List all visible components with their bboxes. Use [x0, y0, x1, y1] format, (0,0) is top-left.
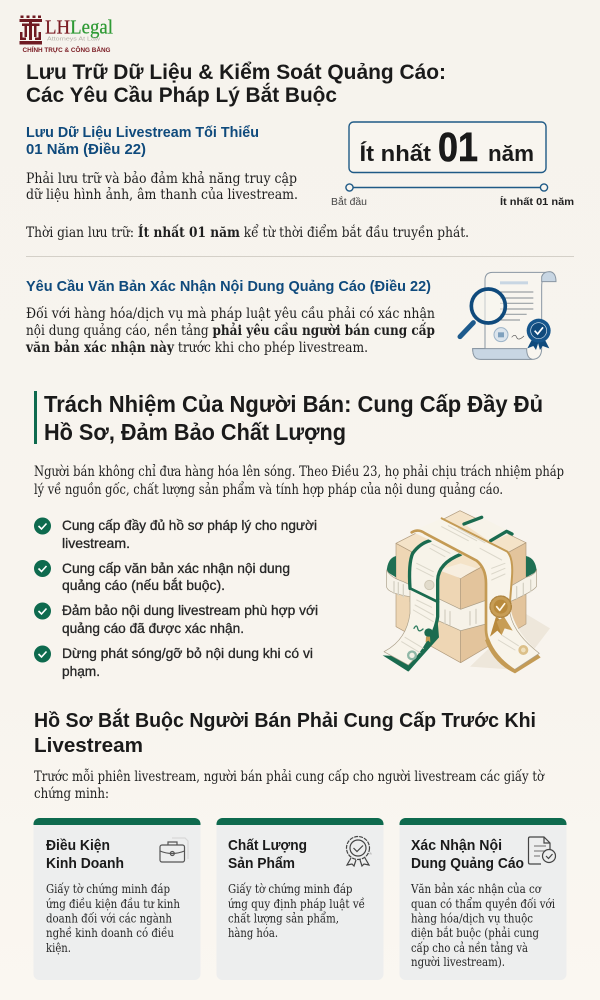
checklist — [34, 518, 318, 679]
card title: Dung Quảng Cáo — [411, 856, 524, 872]
card text: Giấy tờ chứng minh đáp — [228, 881, 353, 896]
card title: Kinh Doanh — [46, 856, 124, 872]
box faces — [396, 543, 461, 663]
illustration: package wrapped in documents — [383, 511, 550, 673]
panel: ad content confirmation — [400, 818, 566, 980]
section heading: seller responsibility — [34, 391, 543, 445]
card text: chất lượng sản phẩm, — [228, 910, 339, 926]
green strap, back part — [464, 517, 512, 542]
list item 1 — [34, 518, 317, 551]
title — [26, 60, 446, 107]
heading: data retention: 01 Năm (Điều 22) — [26, 142, 146, 158]
card title — [411, 838, 524, 872]
card title: Sản Phẩm — [228, 856, 295, 872]
band back ends — [387, 556, 396, 577]
text: confirmation description: văn bản xác nhận này trước khi cho phép livestream. — [25, 340, 368, 356]
card text: nghề kinh doanh có điều — [46, 925, 174, 940]
green strap, front part and tail — [383, 617, 439, 672]
text: retention description — [26, 171, 298, 203]
icon: award rosette — [346, 836, 372, 866]
card text: người livestream). — [411, 955, 505, 969]
card title: Điều Kiện — [46, 838, 110, 854]
gold strap — [485, 628, 541, 673]
logo wordmark: LHLegal — [45, 16, 113, 38]
list item 1: livestream. — [62, 536, 130, 551]
timeline — [331, 184, 574, 208]
card text: Giấy tờ chứng minh đáp — [46, 881, 170, 896]
section heading: seller responsibility: Trách Nhiệm Của Người Bán: Cung Cấp Đầy Đủ — [44, 391, 543, 417]
card title — [228, 838, 307, 872]
list item 4: phạm. — [62, 664, 100, 679]
text: retention period: Thời gian lưu trữ: Ít nhất 01 năm kể từ thời điểm bắt đầu truyền phát. — [26, 225, 469, 241]
card text: diện bắt buộc (phải cung — [411, 925, 539, 940]
callout: at least 01 year: 01 — [438, 124, 478, 170]
text: confirmation description: nội dung quảng cáo, nền tảng phải yêu cầu người bán cung cấp — [26, 323, 435, 339]
heading: ad content confirmation: Yêu Cầu Văn Bản Xác Nhận Nội Dung Quảng Cáo (Điều 22) — [26, 279, 431, 295]
card text — [410, 882, 555, 969]
list item 2: quảng cáo (nếu bắt buộc). — [62, 578, 225, 593]
list item 4 — [34, 646, 313, 679]
callout: at least 01 year — [349, 122, 546, 172]
list item 2: Cung cấp văn bản xác nhận nội dung — [62, 561, 290, 576]
panel: business conditions — [34, 818, 200, 980]
logo motto: CHÍNH TRỰC & CÔNG BẰNG — [22, 46, 111, 54]
text: retention description: dữ liệu hình ảnh, âm thanh của livestream. — [26, 187, 298, 203]
icon: document with magnifier and seal — [460, 272, 556, 359]
card text: ứng quy định pháp luật về — [228, 896, 365, 911]
list item 3: Đảm bảo nội dung livestream phù hợp với — [62, 603, 318, 618]
text: seller responsibility intro: lý về nguồn gốc, chất lượng sản phẩm và tính hợp pháp của nội dung quảng cáo. — [34, 482, 503, 498]
icon: logo mark — [20, 16, 42, 44]
card text: cấp cho cả nền tảng và — [411, 940, 528, 955]
icon: briefcase — [160, 838, 188, 862]
list item 3: quảng cáo đã được xác nhận. — [62, 621, 244, 636]
text: seller responsibility intro — [34, 464, 564, 498]
card text: doanh đối với các ngành — [46, 910, 172, 926]
text: confirmation description — [25, 306, 435, 356]
logo tagline: Attorneys At Law — [47, 36, 100, 42]
gold seal — [490, 617, 503, 637]
callout: at least 01 year: năm — [488, 141, 534, 166]
card text: hàng hóa/dịch vụ thuộc — [411, 912, 533, 926]
section heading: required documents — [34, 708, 536, 757]
timeline: Bắt đầu — [331, 195, 367, 208]
card title: Chất Lượng — [228, 838, 307, 854]
icon: award rosette: * — [369, 851, 372, 860]
card text: hàng hóa. — [228, 926, 278, 940]
card text: Văn bản xác nhận của cơ — [410, 882, 542, 896]
title: Lưu Trữ Dữ Liệu & Kiểm Soát Quảng Cáo: — [26, 60, 446, 84]
text: retention description: Phải lưu trữ và bảo đảm khả năng truy cập — [26, 171, 297, 187]
card text: quan có thẩm quyền đối với — [411, 896, 555, 911]
text: required documents intro — [34, 769, 545, 802]
list item 2 — [34, 560, 290, 593]
logo — [20, 16, 113, 54]
list item 3 — [34, 602, 318, 636]
title: Các Yêu Cầu Pháp Lý Bắt Buộc — [26, 82, 337, 107]
callout: at least 01 year: Ít nhất — [360, 141, 432, 166]
icon: document check — [528, 837, 556, 864]
card text — [46, 881, 180, 955]
heading: data retention: Lưu Dữ Liệu Livestream Tối Thiểu — [26, 125, 259, 141]
horizontal band — [387, 569, 537, 631]
section heading: required documents: Hồ Sơ Bắt Buộc Người Bán Phải Cung Cấp Trước Khi — [34, 708, 536, 732]
card text: ứng điều kiện đầu tư kinh — [46, 896, 180, 911]
card title — [46, 838, 124, 872]
timeline: Ít nhất 01 năm — [500, 195, 574, 208]
panel: product quality — [216, 818, 384, 980]
heading: data retention — [26, 125, 259, 158]
card text: kiện. — [46, 941, 71, 955]
card text — [228, 881, 365, 940]
list item 1: Cung cấp đầy đủ hồ sơ pháp lý cho người — [62, 518, 317, 533]
text: required documents intro: chứng minh: — [34, 786, 109, 802]
text: confirmation description: Đối với hàng hóa/dịch vụ mà pháp luật yêu cầu phải có xác nhận — [26, 306, 435, 322]
section heading: seller responsibility: Hồ Sơ, Đảm Bảo Chất Lượng — [44, 419, 346, 445]
list item 4: Dừng phát sóng/gỡ bỏ nội dung khi có vi — [62, 646, 313, 661]
section heading: required documents: Livestream — [34, 734, 143, 757]
card title: Xác Nhận Nội — [411, 838, 502, 854]
